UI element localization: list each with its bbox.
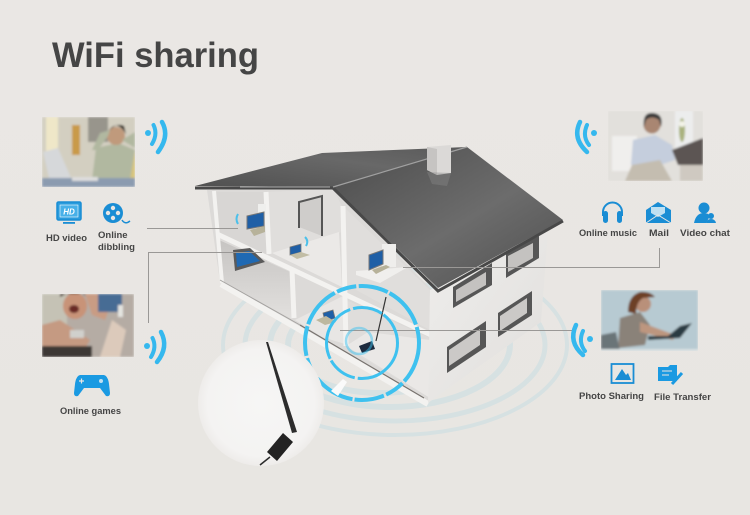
- window lower left: [447, 321, 486, 373]
- label: File Transfer: File Transfer: [654, 392, 711, 403]
- icon: headphones: [603, 202, 622, 223]
- label: HD video: HD video: [46, 233, 87, 244]
- desktop on shelf: [356, 244, 408, 283]
- wifi icon right top: [577, 122, 597, 152]
- wifi icon right bottom: [573, 325, 593, 355]
- icon: file transfer: [658, 365, 682, 384]
- photo: woman with laptop: [601, 290, 698, 351]
- antenna: [266, 342, 297, 433]
- label: Online games: Online games: [60, 406, 121, 417]
- label: Photo Sharing: Photo Sharing: [579, 391, 644, 402]
- icon: video chat: [694, 202, 716, 223]
- dongle body: [267, 433, 293, 461]
- wifi icon left top: [145, 122, 165, 152]
- window lower right: [498, 291, 532, 337]
- label: Online music: Online music: [579, 228, 637, 239]
- window upper right: [506, 236, 539, 278]
- slab shadow line: [300, 325, 424, 398]
- signal rings: [305, 286, 419, 400]
- faint signal waves on the ground: [223, 255, 567, 435]
- chimney: [427, 145, 451, 186]
- label: Video chat: Video chat: [680, 228, 731, 239]
- laptop upper left room: [247, 204, 266, 236]
- roof: [195, 147, 563, 291]
- connector lines: [147, 228, 660, 330]
- laptop ground room: [316, 310, 336, 325]
- icon: photo: [612, 364, 634, 383]
- laptop middle room: [290, 244, 310, 259]
- magnified adapter: [198, 340, 324, 466]
- room back walls: [212, 189, 430, 398]
- label: Mail: Mail: [649, 228, 669, 239]
- photo: man with headphones: [608, 111, 703, 181]
- TV lower left room: [233, 248, 265, 271]
- structure: slabs and walls: [214, 191, 431, 404]
- icon: mail: [646, 202, 671, 223]
- icon: HD monitor: [57, 202, 81, 224]
- photo: man with laptop: [42, 117, 135, 187]
- house: [195, 145, 563, 404]
- label: Online dibbling: dibbling: [98, 242, 135, 253]
- cable: [260, 457, 270, 465]
- WiFi adapter in house: [359, 297, 386, 353]
- icon: HD monitor: HD: [63, 208, 75, 216]
- interior rooms: [207, 188, 432, 403]
- title: WiFi sharing: [52, 36, 259, 75]
- label: Online dibbling: Online: [98, 230, 128, 241]
- door: [299, 196, 322, 236]
- white lens circle: [198, 340, 324, 466]
- wifi mark upper room: [236, 214, 238, 224]
- magnifier beam: [331, 379, 347, 396]
- right exterior wall: [428, 232, 548, 403]
- icon: gamepad: [74, 375, 110, 396]
- icon: film reel: [103, 203, 130, 223]
- photo: gamers: [42, 293, 134, 357]
- wifi mark middle room: [305, 237, 307, 246]
- window upper left: [453, 263, 492, 308]
- wifi icon left bottom: [144, 332, 164, 362]
